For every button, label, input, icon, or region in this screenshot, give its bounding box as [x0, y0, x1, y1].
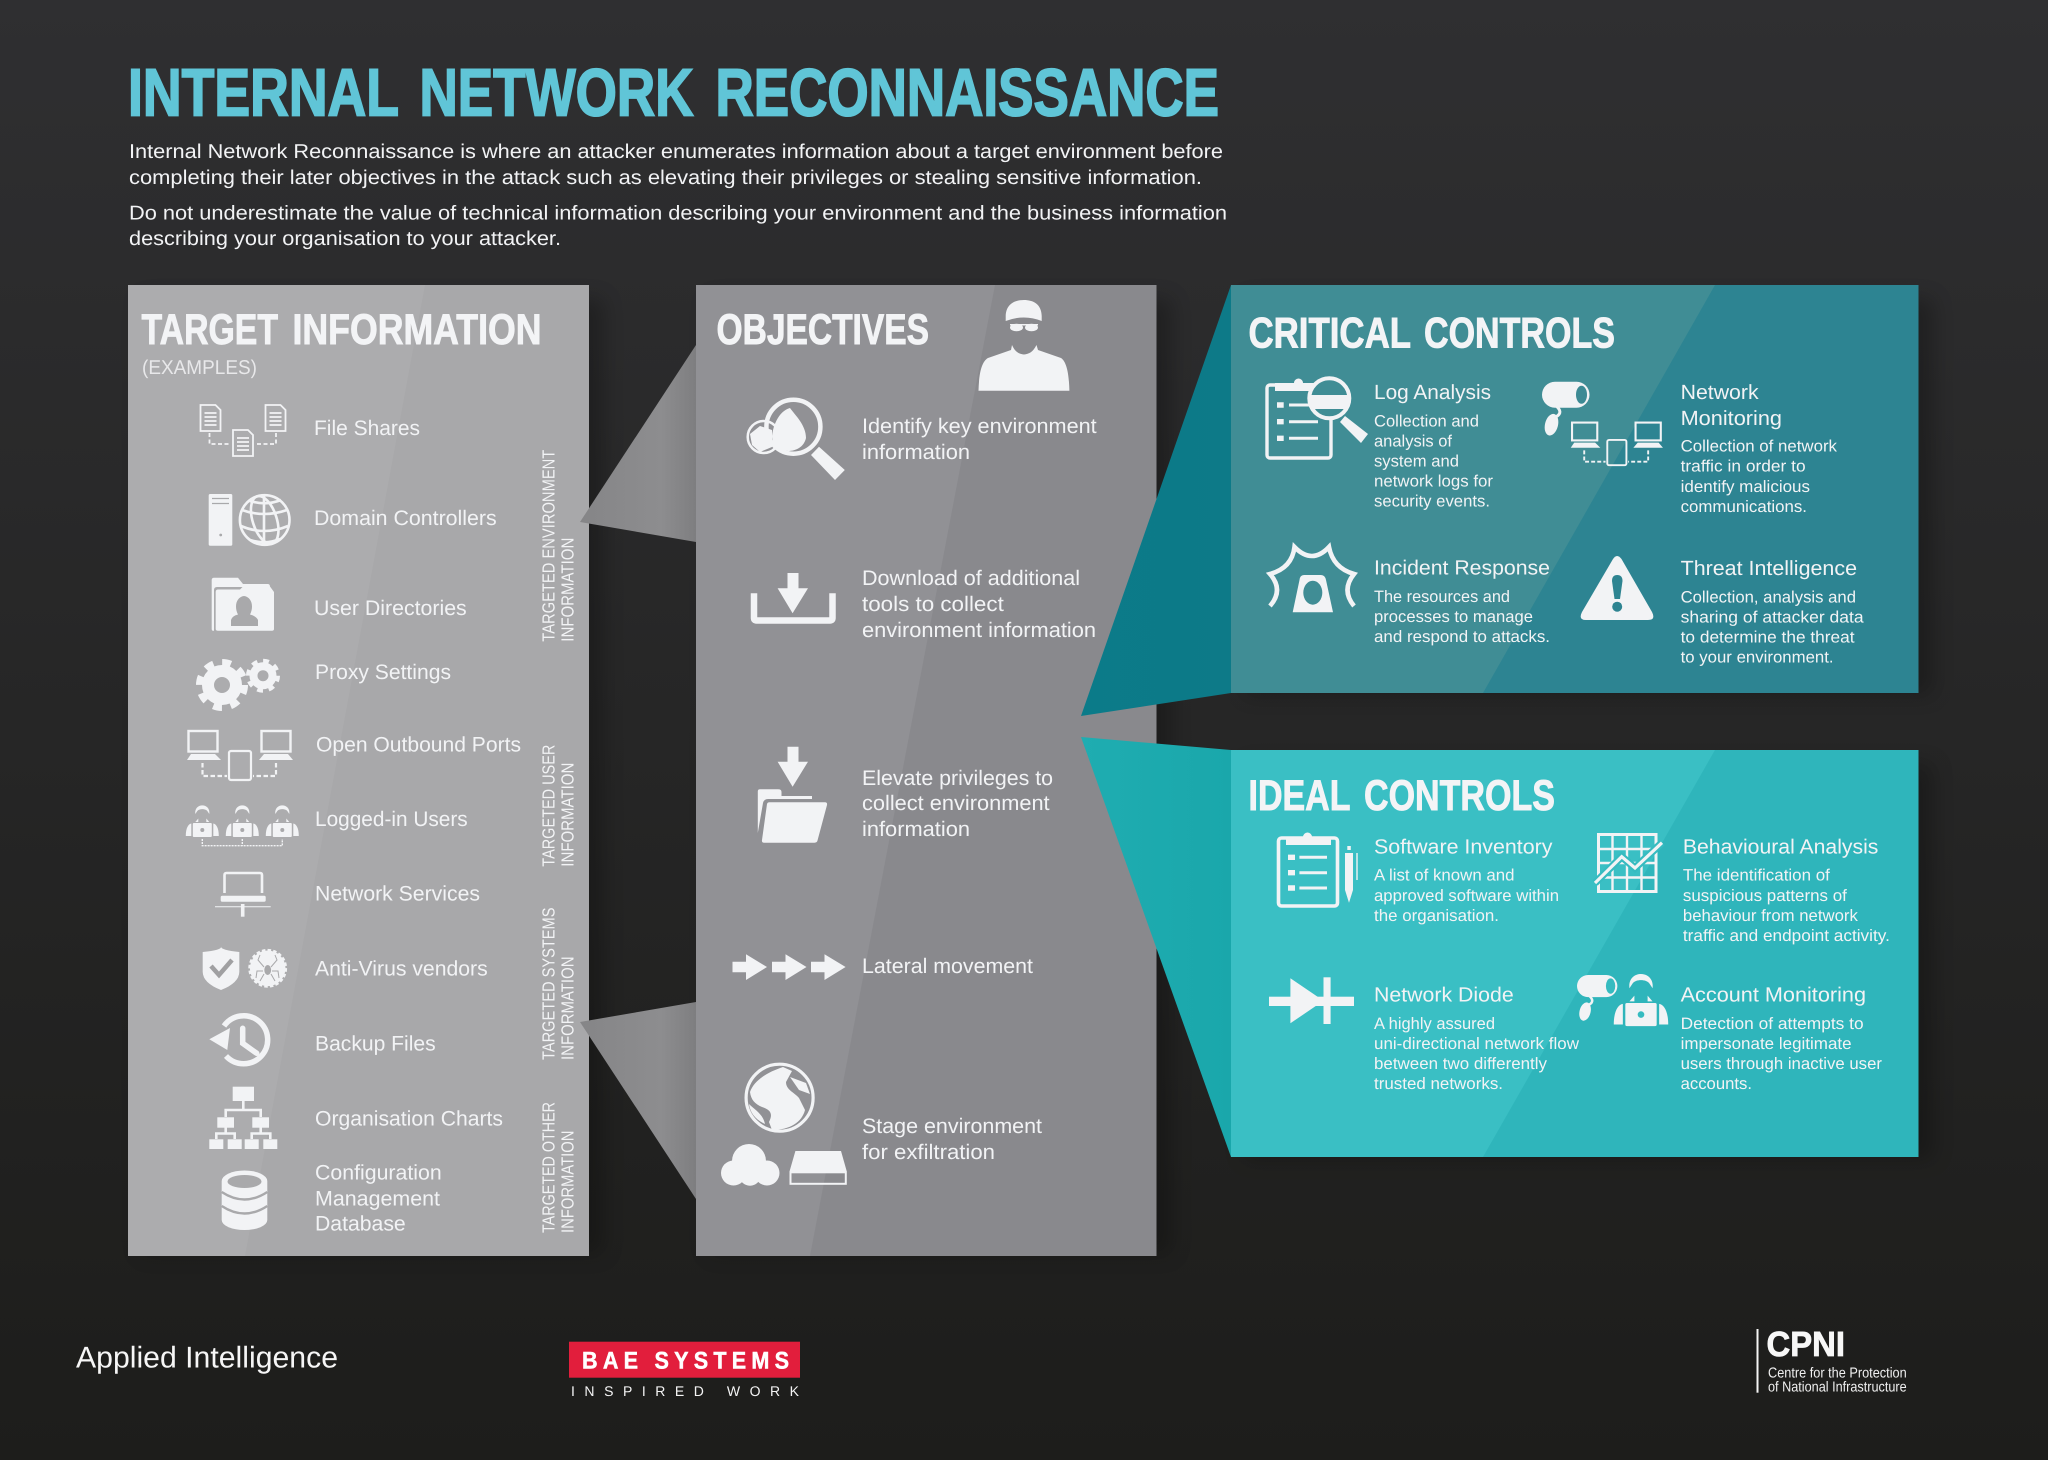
text: Detection of attempts to: [1681, 1015, 1864, 1033]
label: Elevate privileges to: [862, 767, 1053, 790]
item: open outbound ports: [187, 731, 521, 780]
text: Monitoring: [1681, 407, 1782, 430]
text: [1374, 556, 1550, 646]
text: system and: [1374, 453, 1459, 471]
item: network diode: [1269, 977, 1579, 1093]
item: file shares: [200, 405, 420, 456]
heading: ideal controls: [1248, 772, 1555, 820]
connector: objectives to critical controls: [1081, 285, 1231, 716]
item: network services: [215, 873, 480, 917]
icon: shield and spider badge: [203, 947, 286, 990]
label: tools to collect: [862, 593, 1004, 616]
icon: warning triangle: [1581, 556, 1653, 620]
label: file shares: File Shares: [314, 417, 420, 440]
item: threat intelligence: [1581, 556, 1864, 667]
text: approved software within: [1374, 887, 1559, 905]
item: incident response: [1270, 547, 1550, 646]
text: Collection, analysis and: [1681, 589, 1856, 607]
text: [1681, 381, 1838, 516]
text: Network Diode: [1374, 984, 1514, 1007]
icon: diode: [1269, 977, 1354, 1024]
item: user directories: [212, 578, 467, 631]
panel: target information: [128, 285, 589, 1256]
label: Stage environment: [862, 1115, 1042, 1138]
panel: ideal controls: [1231, 750, 1918, 1157]
title: RECONNAISSANCE: [716, 56, 1219, 130]
footer logo: cpni: [1756, 1325, 1907, 1396]
label: network services: Network Services: [315, 883, 480, 906]
vertical label: targeted systems information: TARGETED SYSTEMS: [538, 908, 558, 1060]
item: anti-virus vendors: [203, 947, 488, 990]
text: to determine the threat: [1681, 629, 1855, 647]
icon: globe under magnifier: [748, 400, 845, 480]
text: Collection of network: [1681, 438, 1838, 456]
item: software inventory: [1278, 832, 1559, 925]
label: environment information: [862, 619, 1096, 642]
icon: grid with trend line: [1595, 834, 1662, 892]
intro text: [129, 141, 1227, 250]
panel: objectives: [696, 285, 1156, 1256]
text: impersonate legitimate: [1681, 1035, 1852, 1053]
icon: clipboard and pen: [1278, 832, 1357, 906]
icon: users with laptops: [186, 805, 299, 846]
label: [862, 415, 1097, 464]
label: organisation charts: Organisation Charts: [315, 1108, 503, 1131]
panel: critical controls: [1231, 285, 1918, 693]
title: INTERNAL: [128, 56, 399, 130]
label: anti-virus vendors: Anti-Virus vendors: [315, 958, 488, 981]
intro text: describing your organisation to your attacker.: [129, 228, 561, 250]
label: configuration management database: Management: [315, 1188, 440, 1211]
heading: target information: INFORMATION: [292, 306, 542, 354]
text: accounts.: [1681, 1075, 1752, 1093]
text: users through inactive user: [1681, 1055, 1883, 1073]
label: open outbound ports: Open Outbound Ports: [316, 734, 521, 756]
item: network monitoring: [1542, 381, 1838, 516]
footer logo: cpni: CPNI: [1766, 1325, 1845, 1364]
heading: ideal controls: CONTROLS: [1364, 772, 1555, 820]
vertical label: targeted systems information: INFORMATION: [558, 956, 578, 1060]
text: analysis of: [1374, 433, 1452, 451]
icon: org chart: [209, 1087, 277, 1149]
label: for exfiltration: [862, 1141, 995, 1164]
text: traffic and endpoint activity.: [1683, 927, 1890, 945]
label: [862, 767, 1053, 841]
icon: server and globe: [209, 493, 290, 547]
text: Account Monitoring: [1681, 984, 1866, 1007]
item: stage environment for exfiltration: [721, 1064, 1042, 1186]
text: to your environment.: [1681, 649, 1834, 667]
heading: target information: [142, 306, 542, 354]
item: backup files: [209, 1016, 436, 1064]
item: account monitoring: [1577, 974, 1883, 1093]
connector: objectives to ideal controls: [1081, 737, 1231, 1157]
label: information: [862, 441, 970, 464]
title: [128, 56, 1219, 130]
text: suspicious patterns of: [1683, 887, 1847, 905]
icon: gears: [200, 661, 278, 708]
text: [1374, 381, 1494, 510]
vertical label: targeted environment information: [538, 449, 578, 642]
text: processes to manage: [1374, 608, 1533, 626]
text: Collection and: [1374, 413, 1479, 431]
item: configuration management database: [222, 1162, 442, 1236]
label: configuration management database: [315, 1162, 442, 1236]
vertical label: targeted environment information: TARGETED ENVIRONMENT: [538, 449, 558, 642]
icon: networked laptop: [215, 873, 271, 917]
icon: network devices: [187, 731, 293, 780]
text: communications.: [1681, 498, 1807, 516]
text: identify malicious: [1681, 478, 1810, 496]
text: Threat Intelligence: [1681, 557, 1857, 580]
text: [1683, 836, 1890, 945]
footer logo: bae systems: BAE SYSTEMS: [582, 1347, 789, 1374]
icon: globe, cloud and storage: [721, 1064, 847, 1186]
title: NETWORK: [420, 56, 694, 130]
vertical label: targeted systems information: [538, 908, 578, 1060]
footer logo: cpni: of National Infrastructure: [1768, 1380, 1907, 1396]
item: identify key environment information: [748, 400, 1097, 480]
label: proxy settings: Proxy Settings: [315, 661, 451, 684]
heading: objectives: OBJECTIVES: [716, 306, 929, 354]
icon: database: [222, 1171, 267, 1230]
item: download tools: [754, 567, 1096, 642]
text: [1681, 557, 1864, 667]
text: uni-directional network flow: [1374, 1035, 1579, 1053]
text: traffic in order to: [1681, 458, 1806, 476]
label: domain controllers: Domain Controllers: [314, 507, 497, 530]
heading: target information: TARGET: [142, 306, 278, 354]
text: behaviour from network: [1683, 907, 1859, 925]
item: behavioural analysis: [1595, 834, 1890, 945]
icon: three arrows: [732, 954, 846, 980]
text: and respond to attacks.: [1374, 628, 1550, 646]
vertical label: targeted other information: INFORMATION: [558, 1130, 578, 1233]
icon: siren: [1270, 547, 1354, 612]
vertical label: targeted user information: TARGETED USER: [538, 745, 558, 867]
text: between two differently: [1374, 1055, 1548, 1073]
vertical label: targeted user information: INFORMATION: [558, 763, 578, 867]
label: configuration management database: Database: [315, 1213, 406, 1236]
vertical label: targeted other information: TARGETED OTHER: [538, 1102, 558, 1233]
icon: backup clock: [209, 1016, 268, 1064]
text: Behavioural Analysis: [1683, 836, 1878, 859]
icon: hacker silhouette: [978, 300, 1069, 391]
text: trusted networks.: [1374, 1075, 1503, 1093]
text: [1681, 984, 1883, 1093]
subheading: examples: (EXAMPLES): [142, 357, 257, 379]
item: log analysis: [1267, 378, 1494, 510]
icon: clipboard with magnifier: [1267, 378, 1368, 458]
vertical label: targeted other information: [538, 1102, 578, 1233]
text: Incident Response: [1374, 556, 1550, 580]
heading: critical controls: CONTROLS: [1424, 310, 1615, 358]
text: [1374, 836, 1559, 925]
footer logo: bae systems: [569, 1342, 800, 1399]
label: collect environment: [862, 792, 1050, 815]
item: logged-in users: [186, 805, 468, 846]
text: [1374, 984, 1579, 1093]
heading: ideal controls: IDEAL: [1248, 772, 1350, 820]
vertical label: targeted user information: [538, 745, 578, 867]
item: domain controllers: [209, 493, 497, 547]
intro text: Internal Network Reconnaissance is where an attacker enumerates information about a target environment before: [129, 141, 1223, 163]
label: [862, 1115, 1042, 1164]
label: user directories: User Directories: [314, 597, 467, 620]
item: organisation charts: [209, 1087, 503, 1149]
heading: critical controls: [1248, 310, 1615, 358]
label: logged-in users: Logged-in Users: [315, 808, 468, 831]
text: A list of known and: [1374, 867, 1514, 885]
label: backup files: Backup Files: [315, 1033, 436, 1056]
connector: target information to objectives (bottom): [580, 1002, 696, 1199]
footer: applied intelligence: Applied Intelligence: [76, 1342, 338, 1375]
text: the organisation.: [1374, 907, 1499, 925]
label: Identify key environment: [862, 415, 1097, 438]
icon: file shares: [200, 405, 286, 456]
item: proxy settings: [200, 661, 451, 708]
heading: critical controls: CRITICAL: [1248, 310, 1411, 358]
icon: download: [754, 573, 832, 620]
intro text: completing their later objectives in the attack such as elevating their privileges or stealing sensitive information.: [129, 167, 1202, 189]
vertical label: targeted environment information: INFORMATION: [558, 538, 578, 642]
footer logo: bae systems: INSPIRED WORK: [571, 1383, 800, 1399]
label: [862, 567, 1096, 642]
text: The identification of: [1683, 867, 1830, 885]
label: configuration management database: Configuration: [315, 1162, 442, 1185]
label: information: [862, 818, 970, 841]
text: security events.: [1374, 492, 1490, 510]
text: Log Analysis: [1374, 381, 1491, 404]
text: Software Inventory: [1374, 836, 1553, 859]
text: network logs for: [1374, 472, 1494, 490]
item: lateral movement: [732, 954, 1033, 980]
label: Lateral movement: [862, 955, 1033, 978]
connector: target information to objectives (top): [580, 345, 696, 542]
item: elevate privileges: [758, 747, 1053, 843]
text: Network: [1681, 381, 1759, 404]
icon: arrow into folder: [758, 747, 827, 843]
label: Download of additional: [862, 567, 1080, 590]
icon: camera and network: [1542, 382, 1663, 465]
icon: camera and user: [1577, 974, 1668, 1026]
text: A highly assured: [1374, 1015, 1495, 1033]
text: The resources and: [1374, 588, 1510, 606]
footer logo: cpni: Centre for the Protection: [1768, 1366, 1907, 1382]
icon: user folder: [212, 578, 274, 631]
intro text: Do not underestimate the value of technical information describing your environment and the business information: [129, 202, 1227, 224]
text: sharing of attacker data: [1681, 609, 1864, 627]
